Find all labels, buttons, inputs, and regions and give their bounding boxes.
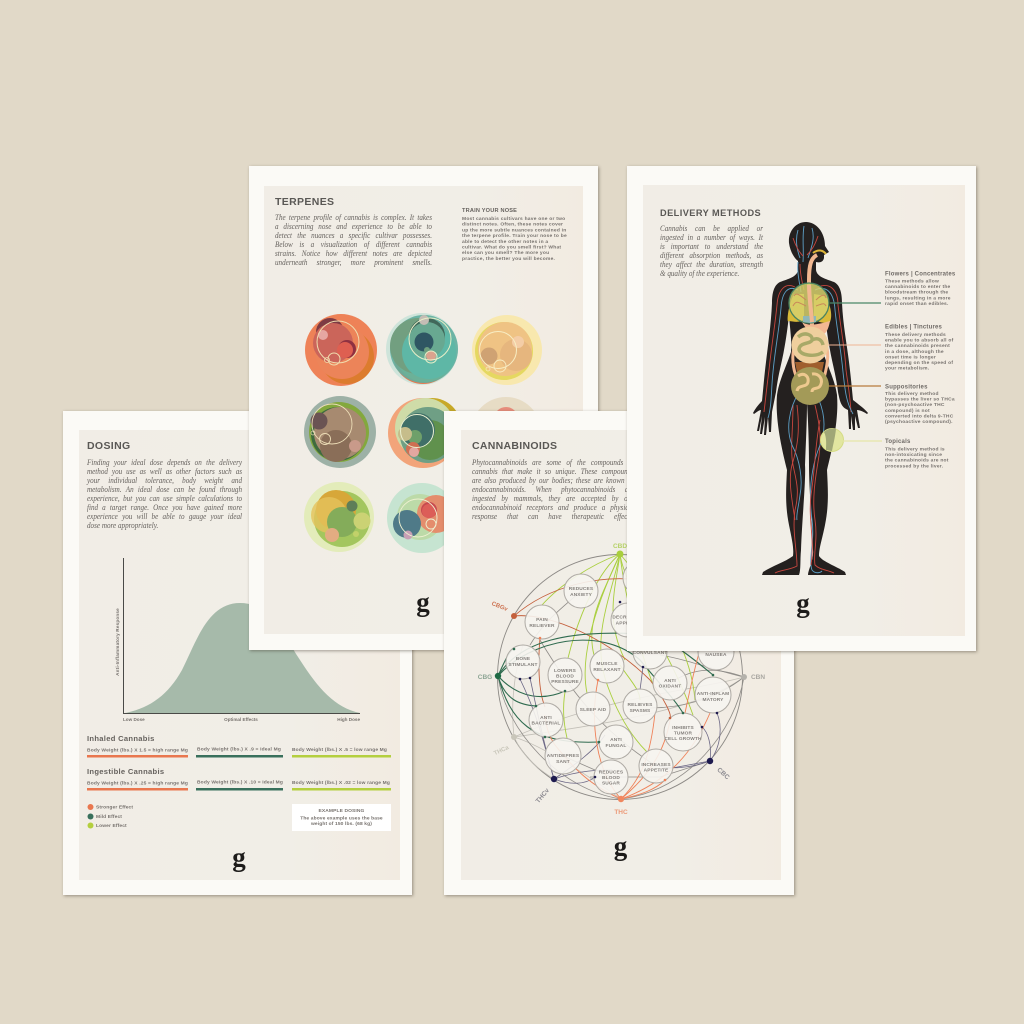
text block: edibles and tinctures: Edibles | Tinctures	[885, 324, 943, 330]
circle: strain 7	[304, 482, 374, 552]
text block: delivery intro: is important to understand the	[660, 242, 763, 251]
effect labels: CONVULSANT	[633, 650, 667, 656]
chart: dose response curve: High Dose	[337, 717, 360, 722]
text block: dosing intro: your individual tolerance, body weight and	[87, 476, 242, 485]
text block: delivery intro: different absorption methods, as	[660, 251, 763, 260]
cannabinoid hubs: CBGv	[491, 601, 509, 613]
text block: terpenes intro: underneath stronger, more prominent smells.	[275, 258, 432, 267]
text block: train your nose: practice, the better you will become.	[462, 256, 556, 262]
logo: g	[614, 831, 628, 861]
dosing table: inhaled cannabis	[87, 734, 391, 758]
text block: delivery intro	[660, 224, 764, 278]
organ highlight: skin	[820, 428, 844, 452]
circle: strain 1	[305, 314, 377, 386]
edge endpoints	[513, 601, 718, 781]
text block: suppositories: compound) is not	[885, 408, 930, 414]
callout line: topicals	[843, 440, 882, 442]
text block: terpenes intro: Below is a visualization of different cannabis	[275, 240, 432, 249]
text block: cannabinoids intro: cannabis that make it so unique. These compounds	[472, 467, 634, 476]
chart: dose response curve: Anti-Inflammatory Response	[115, 608, 120, 676]
effect labels: ANXIETY	[570, 592, 593, 598]
effect labels: INHIBITS	[672, 725, 695, 731]
text block: delivery intro: they affect the duration, strength	[660, 260, 763, 269]
heading: terpenes: TERPENES	[275, 196, 334, 208]
text block: train your nose	[462, 208, 567, 262]
circle: strain 6	[471, 397, 541, 467]
dosing graphics	[87, 558, 391, 872]
text block: dosing intro	[86, 458, 242, 530]
effect labels: RELIEVES	[628, 702, 653, 708]
callout: example dosing: The above example uses the base	[300, 816, 383, 822]
text block: suppositories	[885, 384, 955, 425]
text block: suppositories: bypasses the liver so THCa	[885, 397, 955, 403]
delivery graphics	[753, 222, 956, 618]
effect labels: BACTERIAL	[531, 720, 561, 726]
effect labels: NAUSEA	[705, 652, 727, 658]
text block: edibles and tinctures: the cannabinoids present	[885, 343, 950, 349]
logo: g	[232, 842, 246, 872]
effect labels: ANTIDEPRES	[547, 753, 580, 759]
callout: example dosing: EXAMPLE DOSING	[319, 808, 365, 814]
text block: dosing intro: dose more appropriately.	[87, 521, 158, 530]
organ highlight: lungs	[789, 283, 829, 323]
dosing table: inhaled cannabis: Body Weight (lbs.) X .9 = Ideal Mg	[197, 746, 281, 752]
veins	[764, 226, 853, 573]
effect labels: REDUCES	[599, 770, 624, 776]
text block: suppositories: (psychoactive compound).	[885, 419, 953, 425]
cannabinoid hubs: CBN	[751, 674, 765, 681]
text block: topicals	[885, 439, 949, 469]
effect labels: MUSCLE	[596, 661, 618, 667]
callout line: edibles	[828, 344, 881, 346]
dosing table: ingestible cannabis: Body Weight (lbs.) X .25 = high range Mg	[87, 780, 188, 786]
text block: topicals: non-intoxicating since	[885, 452, 942, 458]
heading: delivery methods: DELIVERY METHODS	[660, 208, 761, 218]
text block: dosing intro: Finding your ideal dose depends on the delivery	[87, 458, 242, 467]
text block: edibles and tinctures: in a dose, although the	[885, 349, 944, 355]
text block: flowers and concentrates	[885, 272, 956, 307]
panel: cannabinoids	[444, 411, 794, 895]
text block: train your nose: TRAIN YOUR NOSE	[462, 208, 517, 214]
text block: dosing intro: experience, but you can use simple calculations to	[87, 494, 242, 503]
effect labels: MATORY	[702, 697, 724, 703]
effect labels: PAIN	[536, 617, 548, 623]
dosing table: ingestible cannabis: Ingestible Cannabis	[87, 767, 164, 776]
effect labels: SANT	[556, 759, 570, 765]
text block: terpenes intro	[275, 213, 432, 267]
effect labels: REDUCES	[628, 576, 653, 582]
text block: train your nose: the terpene profile. Train your nose to be	[462, 233, 567, 239]
text block: suppositories: converted into delta 9-THC	[885, 413, 954, 419]
effect labels: BONE	[516, 656, 531, 662]
text block: delivery intro: ingested in a number of ways. It	[660, 233, 763, 242]
text block: cannabinoids intro: endocannabinoids. When phytocannabinoids are	[472, 485, 634, 494]
legend: Lower Effect	[96, 823, 127, 829]
dosing table: ingestible cannabis: Body Weight (lbs.) X .02 = low range Mg	[292, 780, 390, 786]
legend: Mild Effect	[96, 814, 122, 820]
cannabinoid hubs: THCv	[535, 787, 551, 805]
effect labels: SPASMS	[630, 708, 651, 714]
text block: train your nose: up the more subtle nuances contained in	[462, 227, 566, 233]
panel: terpenes	[249, 166, 598, 650]
text block: train your nose: else can you smell? The more you	[462, 250, 549, 256]
panel: delivery methods	[627, 166, 976, 651]
effect labels: PRESSURE	[551, 679, 579, 685]
text block: cannabinoids intro: Phytocannabinoids are some of the compounds in	[472, 458, 634, 467]
logo: g	[796, 588, 810, 618]
text block: cannabinoids intro: ingested by mammals, they are accepted by our	[472, 494, 634, 503]
text block: dosing intro: experience you will be able to gauge your ideal	[87, 512, 242, 521]
text block: edibles and tinctures: your metabolism.	[885, 366, 930, 372]
text block: topicals: This delivery method is	[885, 446, 945, 452]
text block: flowers and concentrates: These methods allow	[885, 278, 939, 284]
text block: delivery intro: & quality of the experience.	[660, 269, 739, 278]
text block: cannabinoids intro: are also produced by our bodies; these are known as	[472, 476, 634, 485]
network diagram	[478, 543, 765, 861]
text block: dosing intro: find a target range. Once you have gained more	[87, 503, 242, 512]
chart: dose response curve	[115, 558, 360, 722]
network edges	[498, 554, 744, 800]
text block: terpenes intro: strains. Notice how different notes are depicted	[275, 249, 432, 258]
logo: g	[416, 587, 430, 617]
text block: suppositories: Suppositories	[885, 384, 928, 390]
dosing table: inhaled cannabis: Body Weight (lbs.) X 1.5 = high range Mg	[87, 748, 188, 754]
organ highlight: intestines	[791, 367, 829, 405]
effect labels: OXIDANT	[659, 684, 681, 690]
text block: terpenes intro: a discerning nose and experience to be able to	[275, 222, 432, 231]
text block: train your nose: able to detect the other notes in a	[462, 239, 548, 245]
effect labels: INCREASES	[641, 762, 671, 768]
organ highlight: stomach	[792, 326, 828, 364]
heading: dosing: DOSING	[87, 440, 131, 452]
text block: terpenes intro: The terpene profile of cannabis is complex. It takes	[275, 213, 432, 222]
dosing table: inhaled cannabis: Inhaled Cannabis	[87, 734, 155, 743]
cannabinoid hubs: THC	[614, 809, 628, 816]
organs	[788, 294, 831, 323]
text block: topicals: processed by the liver.	[885, 463, 944, 469]
dosing table: ingestible cannabis: Body Weight (lbs.) X .10 = Ideal Mg	[197, 780, 283, 786]
cannabinoid hubs: CBC	[715, 767, 731, 781]
cannabinoid hubs: THCa	[493, 745, 511, 757]
effect nodes	[506, 561, 734, 794]
chart: dose response curve: Low Dose	[123, 717, 145, 722]
callout: example dosing	[292, 804, 391, 831]
effect labels: SLEEP AID	[580, 707, 607, 713]
text block: edibles and tinctures: enable you to absorb all of	[885, 338, 954, 344]
effect labels: SUGAR	[602, 780, 620, 786]
effect labels: CELL GROWTH	[664, 736, 702, 742]
text block: flowers and concentrates: lungs, resulting in a more	[885, 295, 951, 301]
effect labels	[508, 576, 729, 786]
dosing table: ingestible cannabis	[87, 767, 391, 790]
text block: suppositories: (non-psychoactive THC	[885, 402, 945, 408]
panel: dosing	[63, 411, 412, 895]
circle: strain 5	[388, 398, 461, 468]
circle: strain 4	[304, 396, 376, 468]
text block: topicals: Topicals	[885, 439, 911, 445]
effect labels: LOWERS	[554, 668, 577, 674]
text block: delivery intro: Cannabis can be applied or	[660, 224, 763, 233]
callout: example dosing: weight of 150 lbs. (68 kg)	[310, 821, 372, 827]
effect labels: BLOOD	[556, 674, 574, 680]
terpenes graphics	[304, 208, 567, 617]
effect labels: DECREASES	[612, 614, 644, 620]
text block: edibles and tinctures: depending on the speed of	[885, 360, 953, 366]
text block: edibles and tinctures	[885, 324, 954, 372]
circle: strain 8	[387, 483, 457, 553]
effect labels: ANTI-INFLAM	[697, 691, 729, 697]
text block: topicals: the cannabinoids are not	[885, 458, 949, 464]
text block: flowers and concentrates: bloodstream through the	[885, 290, 948, 296]
text block: train your nose: cultivar. What do you smell first? What	[462, 244, 561, 250]
effect labels: RELIEVER	[529, 623, 555, 629]
effect labels: FUNGAL	[606, 743, 626, 749]
chart: dose response curve: Optimal Effects	[224, 717, 258, 722]
circle: strain 2	[386, 313, 458, 385]
text block: cannabinoids intro: endocannabinoid receptors and produce a physical	[472, 503, 634, 512]
effect labels: STIMULANT	[508, 662, 538, 668]
effect labels: ANTI	[610, 737, 622, 743]
text block: dosing intro: method you use as well as other factors such as	[87, 467, 242, 476]
text block: dosing intro: metabolism. An ideal dose can be found through	[87, 485, 242, 494]
effect labels: ANTI	[664, 678, 676, 684]
cannabinoid hubs: CBG	[478, 674, 492, 681]
text block: terpenes intro: detect the nuances a specific cultivar possesses.	[275, 231, 432, 240]
legend: Stronger Effect	[96, 804, 133, 810]
effect labels: REDUCES	[569, 586, 594, 592]
callout line: flowers	[830, 302, 881, 304]
legend	[88, 804, 133, 829]
text block: cannabinoids intro: response that can have therapeutic effects.	[472, 512, 634, 521]
text block: train your nose: distinct notes. Often, these notes cover	[462, 222, 563, 228]
effect labels: BLOOD	[602, 775, 620, 781]
text block: flowers and concentrates: cannabinoids to enter the	[885, 284, 951, 290]
effect labels: RELAXANT	[593, 667, 621, 673]
text block: train your nose: Most cannabis cultivars have one or two	[462, 216, 565, 222]
text block: cannabinoids intro	[472, 458, 634, 521]
human body illustration	[753, 222, 868, 575]
text block: edibles and tinctures: onset time is longer	[885, 354, 936, 360]
text block: edibles and tinctures: These delivery methods	[885, 332, 946, 338]
callout line: suppositories	[829, 385, 881, 387]
effect labels: TUMOR	[674, 730, 693, 736]
cannabinoid hubs	[478, 543, 765, 816]
effect labels: APPETITE	[644, 768, 669, 774]
text block: flowers and concentrates: Flowers | Concentrates	[885, 272, 956, 278]
text block: suppositories: This delivery method	[885, 391, 939, 397]
dosing table: inhaled cannabis: Body Weight (lbs.) X .5 = low range Mg	[292, 747, 387, 753]
effect labels: APPETITE	[616, 620, 641, 626]
circle: strain 3	[472, 315, 542, 385]
heading: cannabinoids: CANNABINOIDS	[472, 440, 557, 452]
text block: flowers and concentrates: rapid onset than edibles.	[885, 301, 949, 307]
cannabinoid hubs: CBD	[613, 543, 627, 550]
effect labels: ANTI	[540, 715, 552, 721]
